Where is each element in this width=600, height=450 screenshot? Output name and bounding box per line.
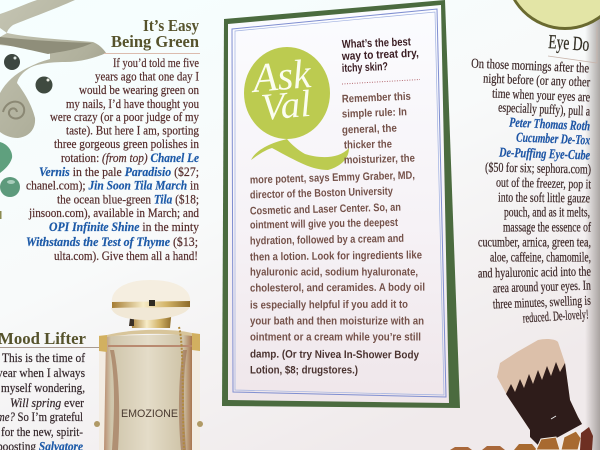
text block: green polish article: the ocean blue-green Tila ($18; [57, 192, 199, 206]
panel: Ask Val [222, 0, 460, 408]
answer text: hydration, followed by a cream and [250, 233, 404, 247]
text block: green polish article: my nails, I’d have thought you [66, 96, 199, 111]
text block: green polish article: jinsoon.com), available in March; and [28, 205, 199, 220]
text block: green polish article: Vernis in the pale Paradisio ($27; [39, 164, 199, 179]
panel green frame [222, 0, 460, 408]
text block: green polish article: OPI Infinite Shine in the minty [49, 219, 199, 234]
text block: mood lifter article [0, 350, 86, 450]
answer text: then a lotion. Look for ingredients like [250, 249, 422, 263]
panel interior [228, 5, 449, 403]
text block: green polish article: Withstands the Test of Thyme ($13; [26, 234, 198, 249]
polish spiral [3, 102, 24, 119]
page gutter shadow [585, 0, 600, 450]
answer text: cholesterol, and ceramides. A body oil [250, 282, 425, 294]
answer text: Remember this [342, 91, 411, 105]
question: itchy skin? [342, 61, 388, 75]
illustration: makeup brush [450, 339, 593, 450]
bottle label: EMOZIONE [121, 408, 178, 420]
text block: green polish article: If you’d told me five [113, 55, 199, 70]
answer text: ointment will give you the deepest [250, 217, 398, 231]
answer text: your bath and then moisturize with an [250, 316, 424, 328]
text block: green polish article: years ago that one day I [95, 68, 199, 84]
green polish drops [0, 142, 12, 173]
answer text: Cosmetic and Laser Center. So, an [250, 202, 401, 217]
text block: mood lifter article: This is the time of [2, 350, 86, 365]
heading: Mood Lifter: Mood Lifter [0, 329, 86, 348]
answer text: Lotion, $8; drugstores.) [250, 364, 358, 376]
text block: mood lifter article: for the new, spirit- [1, 424, 83, 439]
text block: green polish article: chanel.com); Jin Soon Tila March in [26, 178, 199, 192]
illustration: nail polish swirl and drops [0, 0, 106, 219]
neck [130, 308, 172, 328]
gold shoulder collars [99, 335, 107, 352]
answer text: is especially helpful if you add it to [250, 299, 408, 311]
chain [179, 327, 184, 450]
dark polish drops [4, 54, 20, 70]
brush hexagon base [450, 447, 472, 450]
illustration: perfume bottle [94, 280, 203, 450]
side knobs [94, 421, 100, 427]
text block: mood lifter article: me? So I’m grateful [0, 409, 83, 424]
answer text: more potent, says Emmy Graber, MD, [250, 170, 415, 186]
answer text [250, 91, 425, 377]
heading: It's Easy Being Green: It’s Easy [143, 16, 200, 35]
text block: green polish article: three gorgeous green polishes in [54, 136, 199, 151]
text block: mood lifter article: Will spring ever [10, 395, 85, 410]
text block: green polish article: rotation: (from top) Chanel Le [61, 150, 199, 165]
answer text: simple rule: In [342, 106, 407, 120]
answer text: director of the Boston University [250, 185, 394, 201]
text block: green polish article: taste). But here I am, sporting [66, 122, 199, 138]
Ask Val logo: Val [259, 83, 313, 129]
question: way to treat dry, [341, 48, 419, 63]
text block: eye do article [471, 56, 591, 325]
heading: It's Easy Being Green [111, 16, 200, 51]
answer text: moisturizer, the [344, 153, 415, 166]
text block: green polish article [26, 55, 199, 263]
cap [112, 280, 190, 303]
question: What’s the best [342, 36, 411, 51]
answer text: thicker the [344, 138, 392, 151]
Ask Val logo: Ask [248, 50, 313, 101]
answer text: hyaluronic acid, sodium hyaluronate, [250, 266, 418, 278]
bottle body [99, 335, 200, 450]
answer text: ointment or a cream while you’re still [250, 332, 421, 344]
illustration: cucumber slice [505, 0, 600, 30]
text block: mood lifter article: year when I always [0, 365, 85, 380]
text block: green polish article: ulta.com). Give them all a hand! [54, 248, 198, 263]
text block: green polish article: would be wearing green on [79, 82, 199, 97]
answer text: general, the [342, 123, 397, 136]
text block: mood lifter article: myself wondering, [1, 380, 85, 395]
text block: green polish article: were crazy (or a poor judge of my [50, 109, 199, 124]
bottle glass [104, 334, 192, 450]
answer text: damp. (Or try Nivea In-Shower Body [250, 349, 420, 361]
Ask Val logo [244, 47, 349, 170]
question [341, 36, 419, 75]
heading: It's Easy Being Green: Being Green [111, 32, 199, 51]
Eye Do corner rule [548, 27, 597, 63]
